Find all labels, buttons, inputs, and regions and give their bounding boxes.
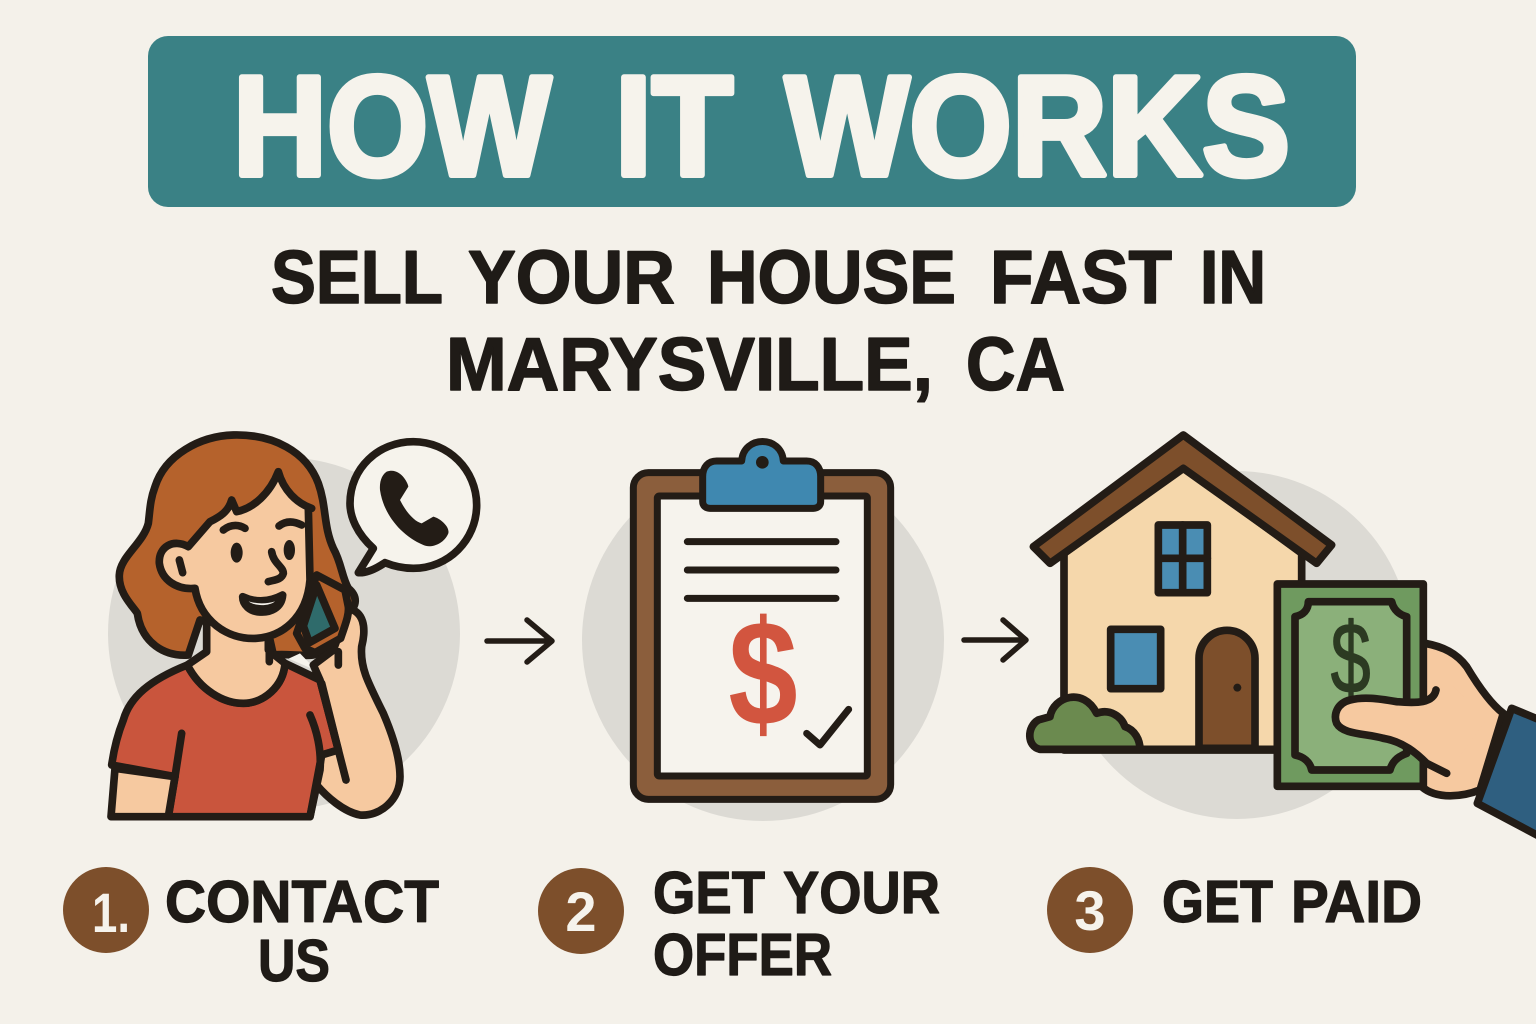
step 2 label: GET: [653, 860, 765, 926]
title banner: HOW: [233, 47, 551, 206]
title banner: WORKS: [785, 47, 1290, 206]
step 3 label: GET: [1162, 869, 1273, 935]
title banner: IT: [615, 47, 733, 206]
subtitle: HOUSE: [707, 235, 956, 319]
step 3 label: [1047, 867, 1422, 953]
step 2 label: 2: [565, 880, 597, 943]
subtitle: YOUR: [468, 235, 675, 319]
subtitle: IN: [1200, 235, 1266, 319]
step 2 label: [538, 860, 940, 988]
step 3 illustration: house and cash in hand: $: [1331, 603, 1371, 714]
step 3 label: 3: [1074, 879, 1106, 942]
subtitle: FAST: [990, 235, 1172, 319]
step 1 label: [63, 867, 439, 994]
step 2 illustration: offer clipboard: [582, 441, 944, 821]
subtitle: SELL: [271, 235, 443, 319]
subtitle: MARYSVILLE,: [446, 322, 933, 406]
step 2 label: OFFER: [653, 922, 832, 988]
step 1 label: CONTACT: [165, 869, 439, 935]
step 2 illustration: offer clipboard: $: [728, 590, 798, 758]
icon: phone speech bubble: [350, 442, 477, 573]
arrow 2: [964, 620, 1026, 660]
step 1 label: 1.: [92, 881, 130, 944]
step 3 illustration: house and cash in hand: [1030, 435, 1536, 837]
title banner: [148, 36, 1356, 207]
subtitle: CA: [966, 322, 1065, 406]
step 2 label: YOUR: [783, 860, 940, 926]
step 3 label: PAID: [1291, 869, 1422, 935]
subtitle: [271, 235, 1266, 406]
step 1 illustration: woman on phone: [108, 435, 460, 817]
arrow 1: [487, 620, 552, 662]
step 1 label: US: [258, 928, 330, 994]
